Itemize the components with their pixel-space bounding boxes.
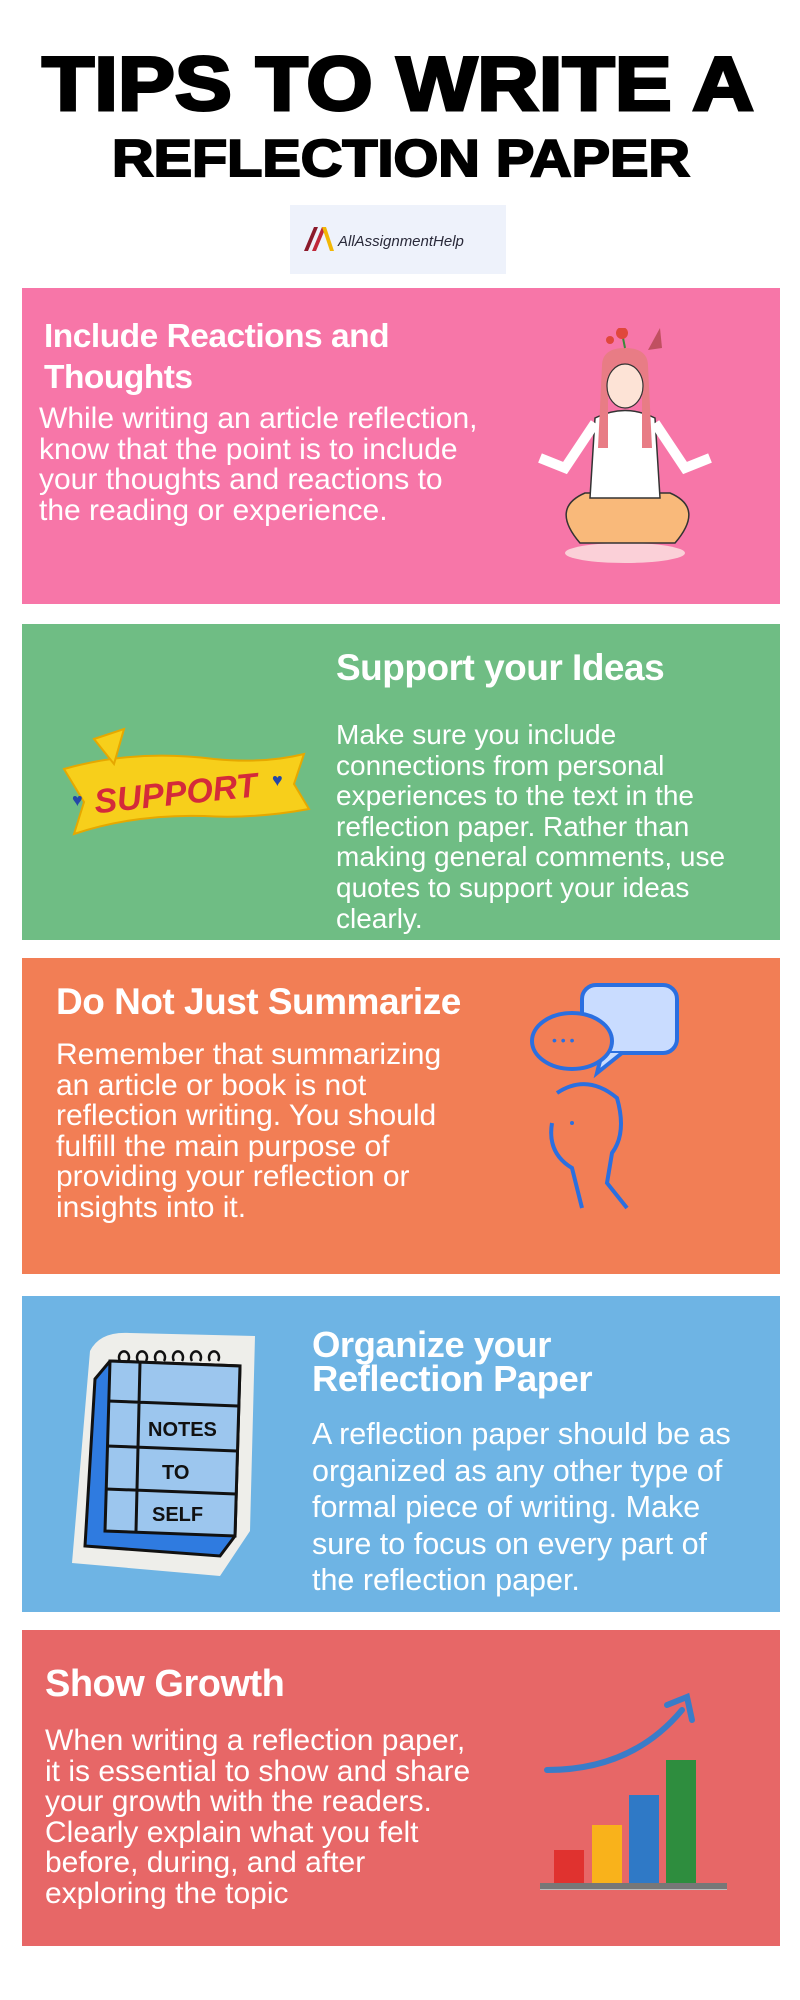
text block: it is essential to show and share (45, 1755, 470, 1788)
title: REFLECTION PAPER (112, 130, 690, 188)
icon: thinking head with speech bubbles (530, 983, 679, 1210)
text block (56, 1038, 441, 1224)
text block: A reflection paper should be as (312, 1417, 731, 1451)
text block: Make sure you include (336, 719, 616, 750)
icon: support banner: SUPPORT (92, 766, 262, 821)
text block: your growth with the readers. (45, 1785, 432, 1818)
text block: your thoughts and reactions to (39, 463, 443, 496)
logo: AllAssignmentHelp (337, 233, 464, 250)
text block: formal piece of writing. Make (312, 1490, 700, 1524)
title (41, 42, 754, 188)
heading: Thoughts (44, 359, 193, 396)
text block (336, 719, 725, 934)
chart: growth bars with arrow (540, 1692, 727, 1890)
icon: support banner: ♥ (272, 770, 283, 790)
text block: making general comments, use (336, 841, 725, 872)
text block: exploring the topic (45, 1877, 288, 1910)
text block (39, 402, 478, 527)
heading: Do Not Just Summarize (56, 981, 461, 1022)
text block: While writing an article reflection, (39, 402, 478, 435)
text block: connections from personal (336, 750, 664, 781)
text block: Remember that summarizing (56, 1038, 441, 1071)
text block: reflection paper. Rather than (336, 811, 689, 842)
icon: notes to self notebook: TO (162, 1462, 189, 1484)
icon: support banner (62, 728, 310, 836)
panel: support ideas (22, 624, 780, 940)
text block: know that the point is to include (39, 433, 458, 466)
text block: reflection writing. You should (56, 1099, 436, 1132)
heading (44, 318, 389, 396)
heading: Include Reactions and (44, 318, 389, 355)
heading: Support your Ideas (336, 647, 664, 688)
heading (312, 1324, 592, 1399)
icon: notes to self notebook: SELF (152, 1504, 203, 1526)
heading: Show Growth (45, 1663, 284, 1705)
panel: do not just summarize (22, 958, 780, 1274)
icon: support banner: ♥ (72, 790, 83, 810)
text block: insights into it. (56, 1191, 246, 1224)
title: TIPS TO WRITE A (42, 42, 754, 127)
panel: include reactions (22, 288, 780, 604)
text block: providing your reflection or (56, 1160, 410, 1193)
icon: notes to self notebook (72, 1332, 255, 1576)
heading: Organize your (312, 1324, 551, 1365)
text block: organized as any other type of (312, 1454, 722, 1488)
heading: Reflection Paper (312, 1358, 592, 1399)
text block (45, 1724, 470, 1910)
icon: meditating woman (538, 328, 712, 563)
text block: When writing a reflection paper, (45, 1724, 465, 1757)
text block: clearly. (336, 903, 423, 934)
text block (312, 1417, 731, 1597)
text block: experiences to the text in the (336, 780, 694, 811)
text block: before, during, and after (45, 1846, 365, 1879)
logo (290, 205, 506, 274)
icon: notes to self notebook: NOTES (148, 1419, 217, 1441)
text block: an article or book is not (56, 1069, 366, 1102)
text block: the reading or experience. (39, 494, 388, 527)
text block: Clearly explain what you felt (45, 1816, 419, 1849)
text block: fulfill the main purpose of (56, 1130, 390, 1163)
icon: thinking head with speech bubbles: • • • (552, 1032, 575, 1048)
panel: organize (22, 1296, 780, 1612)
text block: sure to focus on every part of (312, 1527, 707, 1561)
text block: the reflection paper. (312, 1563, 580, 1597)
panel: show growth (22, 1630, 780, 1946)
text block: quotes to support your ideas (336, 872, 689, 903)
